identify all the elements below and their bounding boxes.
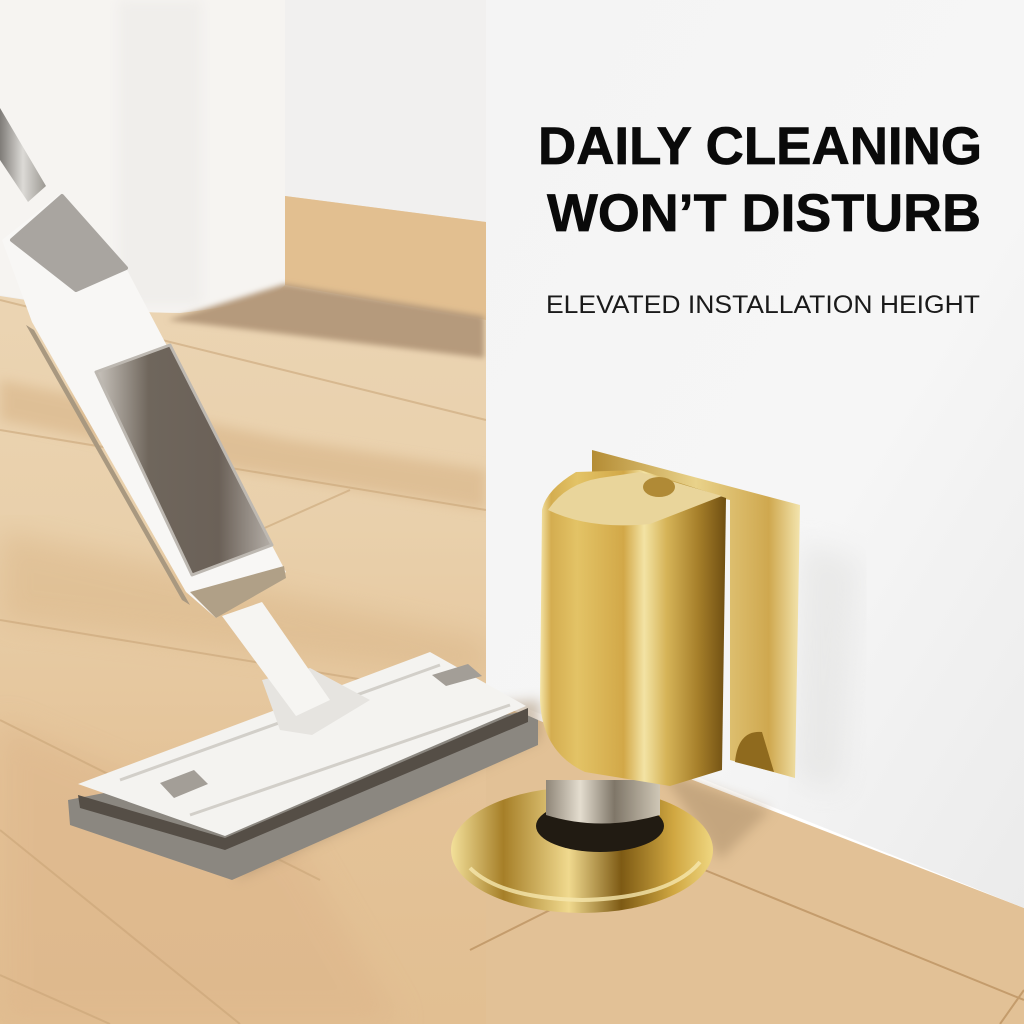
title: WON’T DISTURB: [547, 184, 981, 243]
door stopper: [451, 450, 860, 913]
mop pole: [0, 108, 46, 202]
mop joint: [262, 668, 370, 735]
stopper top: [548, 472, 722, 525]
mop: [0, 108, 540, 880]
mop pad microfiber: [68, 712, 538, 880]
base recess: [536, 800, 664, 852]
round base: [451, 787, 713, 913]
title: DAILY CLEANING: [538, 117, 982, 176]
mop neck: [222, 602, 330, 716]
base rim highlight: [470, 862, 700, 900]
mop body: [2, 194, 286, 618]
plate badges: [160, 770, 208, 798]
lower tank: [96, 345, 272, 575]
background wall: [0, 0, 486, 300]
mop plate: [78, 652, 526, 836]
stopper shadow: [795, 540, 860, 790]
title: [538, 117, 982, 243]
stopper body: [540, 470, 726, 786]
body side edge: [26, 325, 190, 605]
mop plate dark edge: [78, 708, 528, 850]
plate foot highlight: [735, 732, 774, 772]
wall plate: [592, 450, 800, 778]
screw: [643, 477, 675, 497]
background cylinder bin: [0, 0, 285, 313]
floor shadow: [660, 770, 770, 860]
subtitle: ELEVATED INSTALLATION HEIGHT: [546, 291, 980, 319]
upper tank: [12, 196, 126, 290]
mop shadow: [235, 700, 540, 880]
white wall: [486, 0, 1024, 908]
stem: [546, 780, 660, 824]
collar: [190, 566, 286, 618]
